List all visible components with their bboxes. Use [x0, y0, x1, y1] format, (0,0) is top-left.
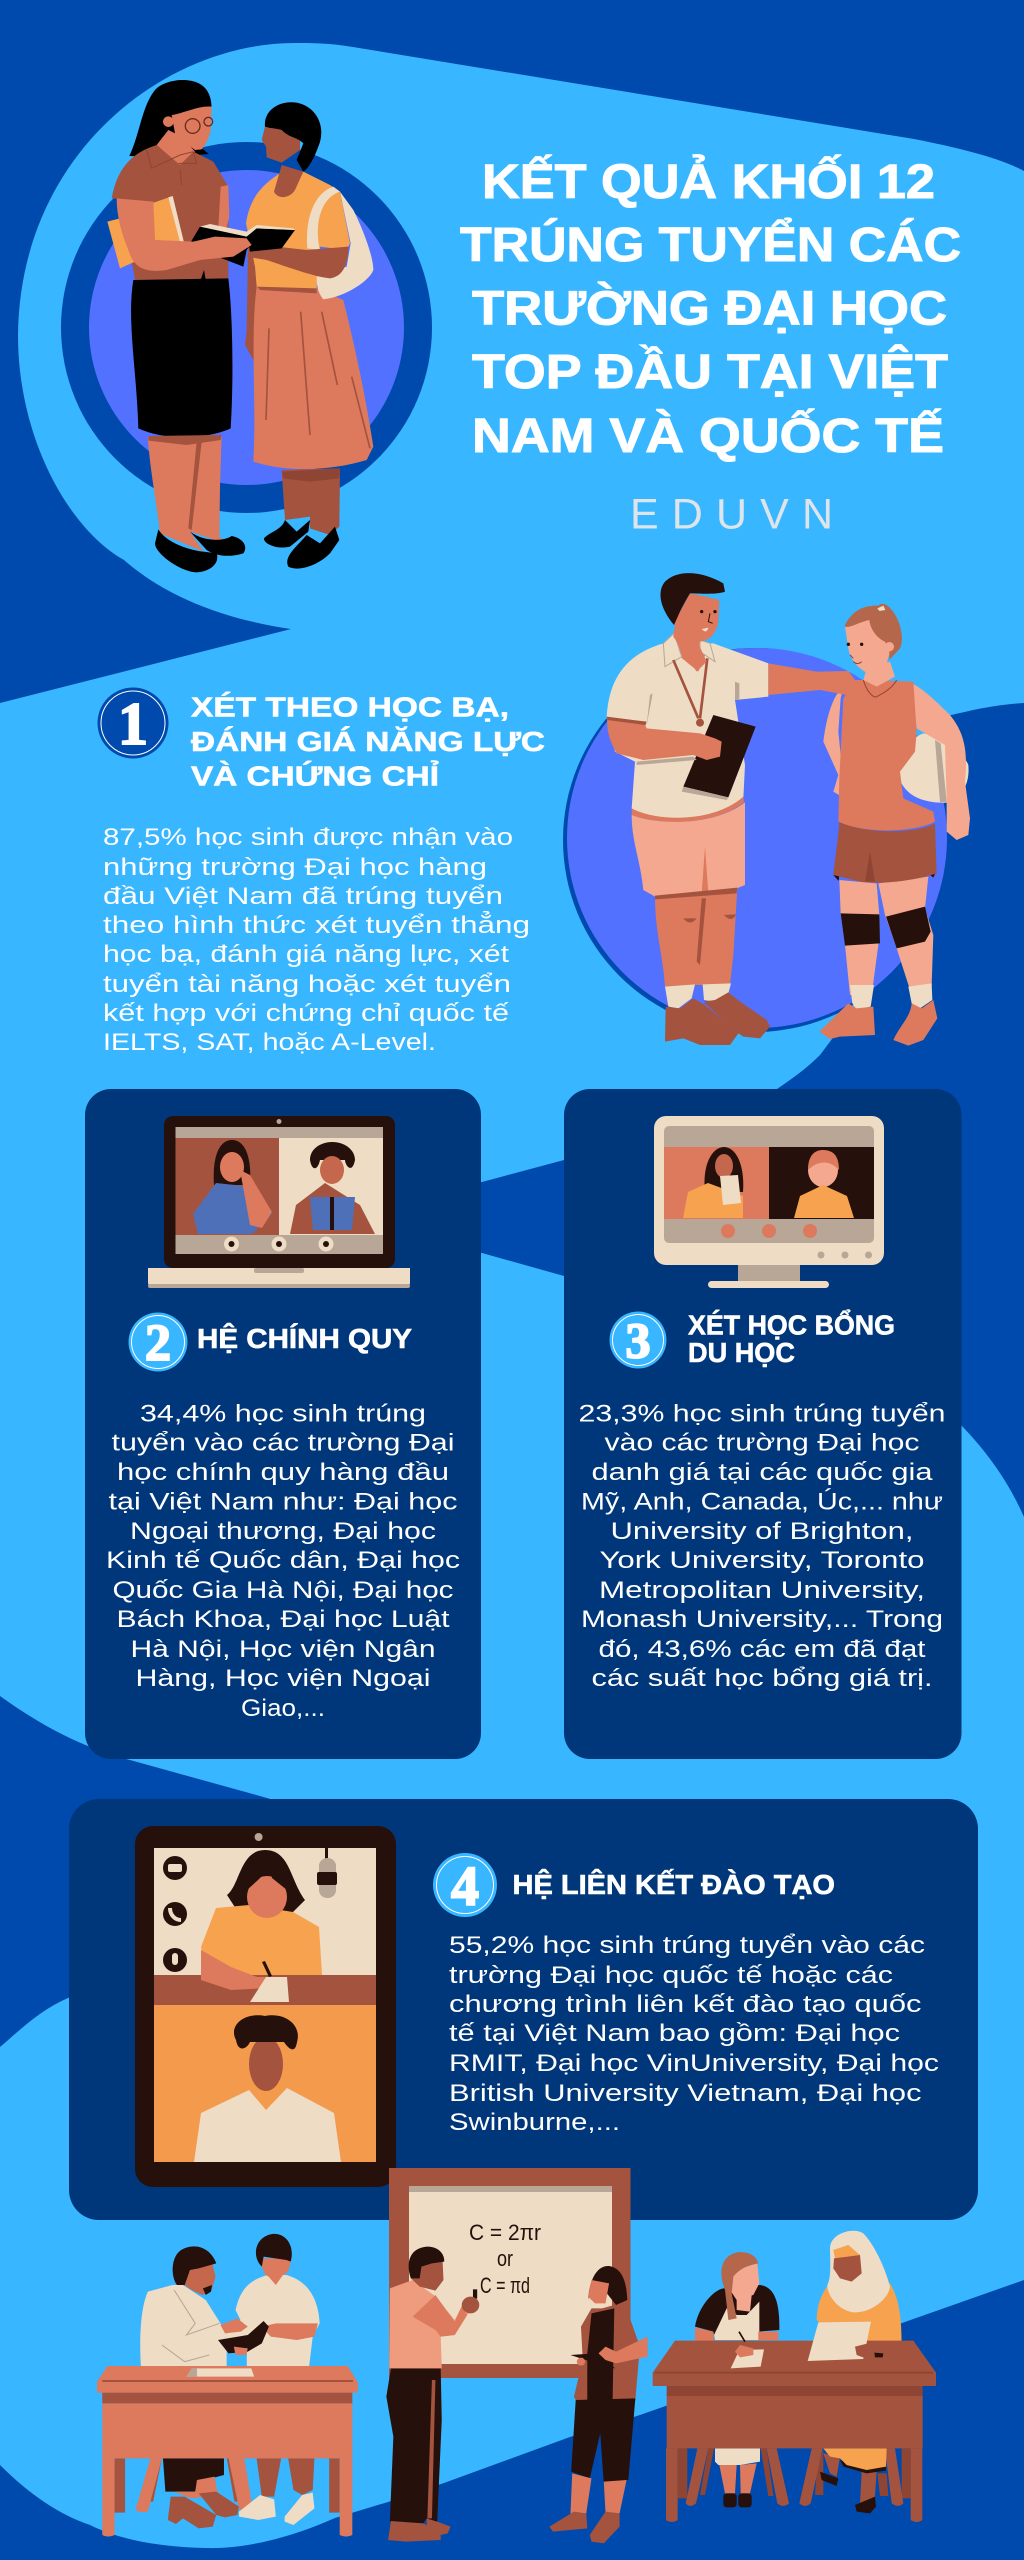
text: section 4 body: chương trình liên kết đào tạo quốc [449, 1991, 922, 2018]
whiteboard [389, 2168, 630, 2378]
text: section 2 body: học chính quy hàng đầu [117, 1459, 449, 1486]
icon: laptop video call [148, 1116, 410, 1288]
badge: number 3: 3 [626, 1312, 650, 1368]
text: section 2 body: Giao,... [241, 1695, 325, 1722]
text: section 3 body: Monash University,... Trong [581, 1606, 943, 1633]
section 1 heading [98, 688, 545, 792]
text: section 2 body: tuyển vào các trường Đại [112, 1430, 454, 1456]
badge: number 1: 1 [118, 691, 148, 757]
section 1 body text: IELTS, SAT, hoặc A-Level. [103, 1029, 436, 1056]
text: section 2 body: Hàng, Học viện Ngoại [136, 1665, 430, 1692]
heading: xet hoc bong du hoc [688, 1310, 895, 1368]
illustration: students at left desk [97, 2234, 358, 2537]
teacher at the board [386, 2247, 479, 2542]
badge: number 3 [610, 1312, 666, 1368]
text: section 4 body: trường Đại học quốc tế hoặc các [449, 1962, 893, 1989]
text: section 3 body: Metropolitan University, [599, 1577, 925, 1604]
section 1 body text: những trường Đại học hàng [103, 854, 487, 881]
heading: he lien ket dao tao: HỆ LIÊN KẾT ĐÀO TẠO [512, 1869, 835, 1900]
text: section 3 body: các suất học bổng giá trị. [592, 1665, 932, 1692]
badge: number 2: 2 [145, 1315, 171, 1372]
title: NAM VÀ QUỐC TẾ [472, 408, 944, 463]
illustration: teacher and student with ball [563, 573, 970, 1046]
panel: section 3 [564, 1089, 962, 1759]
section 1 body text: theo hình thức xét tuyển thẳng [103, 910, 530, 939]
student holding a tablet [549, 2266, 648, 2543]
icon: tablet video call [135, 1826, 396, 2187]
section 1 heading: XÉT THEO HỌC BẠ, [191, 692, 509, 722]
text: section 3 body: University of Brighton, [610, 1518, 914, 1545]
panel: section 2 [85, 1089, 481, 1759]
text: section 2 body: Kinh tế Quốc dân, Đại học [106, 1547, 460, 1574]
illustration: two students reading a book [61, 80, 432, 572]
whiteboard: C = 2πr [469, 2220, 541, 2245]
section 1 heading: ĐÁNH GIÁ NĂNG LỰC [191, 726, 545, 757]
section 1 body text: 87,5% học sinh được nhận vào [103, 824, 513, 851]
icon: desktop monitor video call [654, 1116, 884, 1288]
text: section 2 body [106, 1400, 460, 1722]
title: TOP ĐẦU TẠI VIỆT [472, 344, 948, 399]
text: section 3 body: 23,3% học sinh trúng tuyển [578, 1400, 946, 1428]
text: section 4 body: 55,2% học sinh trúng tuyển vào các [449, 1932, 925, 1959]
badge: number 4: 4 [451, 1856, 479, 1918]
section 1 body text [103, 824, 530, 1056]
heading: he chinh quy: HỆ CHÍNH QUY [197, 1323, 412, 1354]
heading: xet hoc bong du hoc: DU HỌC [688, 1337, 795, 1368]
text: section 4 body: Swinburne,... [449, 2109, 620, 2136]
section 1 body text: học bạ, đánh giá năng lực, xét [103, 941, 509, 968]
section 1 heading: VÀ CHỨNG CHỈ [191, 760, 439, 792]
text: section 4 body: British University Vietnam, Đại học [449, 2080, 922, 2107]
heading: xet hoc bong du hoc: XÉT HỌC BỔNG [688, 1310, 895, 1340]
text: section 3 body: vào các trường Đại học [604, 1430, 920, 1456]
brand name: EDUVN [630, 490, 833, 538]
text: section 4 body [449, 1932, 939, 2136]
title [460, 154, 961, 463]
text: section 2 body: Quốc Gia Hà Nội, Đại học [112, 1577, 454, 1604]
text: section 4 body: RMIT, Đại học VinUniversity, Đại học [449, 2050, 939, 2077]
badge: number 2 [128, 1312, 188, 1372]
text: section 2 body: Ngoại thương, Đại học [130, 1518, 436, 1545]
title: TRƯỜNG ĐẠI HỌC [472, 280, 947, 336]
panel: section 4 [69, 1799, 978, 2220]
text: section 2 body: Bách Khoa, Đại học Luật [116, 1606, 450, 1633]
title: KẾT QUẢ KHỐI 12 [482, 154, 935, 209]
text: section 3 body: đó, 43,6% các em đã đạt [598, 1636, 926, 1663]
text: section 2 body: 34,4% học sinh trúng [140, 1400, 426, 1428]
text: section 3 body: Mỹ, Anh, Canada, Úc,... như [581, 1488, 943, 1516]
title: TRÚNG TUYỂN CÁC [460, 217, 961, 272]
badge: number 4 [433, 1853, 497, 1918]
text: section 3 body: York University, Toronto [600, 1547, 924, 1574]
text: section 3 body [578, 1400, 946, 1692]
badge: number 1 [98, 688, 168, 758]
whiteboard: C = πd [480, 2273, 530, 2298]
section 1 body text: tuyển tài năng hoặc xét tuyển [103, 971, 511, 998]
illustration: students at right desk [653, 2231, 936, 2522]
section 1 body text: đầu Việt Nam đã trúng tuyển [103, 883, 503, 910]
text: section 4 body: tế tại Việt Nam bao gồm: Đại học [449, 2020, 900, 2047]
illustration: whiteboard with teacher and student [386, 2168, 648, 2543]
section 1 body text: kết hợp với chứng chỉ quốc tế [103, 1000, 509, 1027]
text: section 3 body: danh giá tại các quốc gia [592, 1459, 933, 1486]
text: section 2 body: tại Việt Nam như: Đại học [108, 1488, 458, 1516]
text: section 2 body: Hà Nội, Học viện Ngân [130, 1636, 436, 1663]
whiteboard: or [497, 2246, 513, 2271]
